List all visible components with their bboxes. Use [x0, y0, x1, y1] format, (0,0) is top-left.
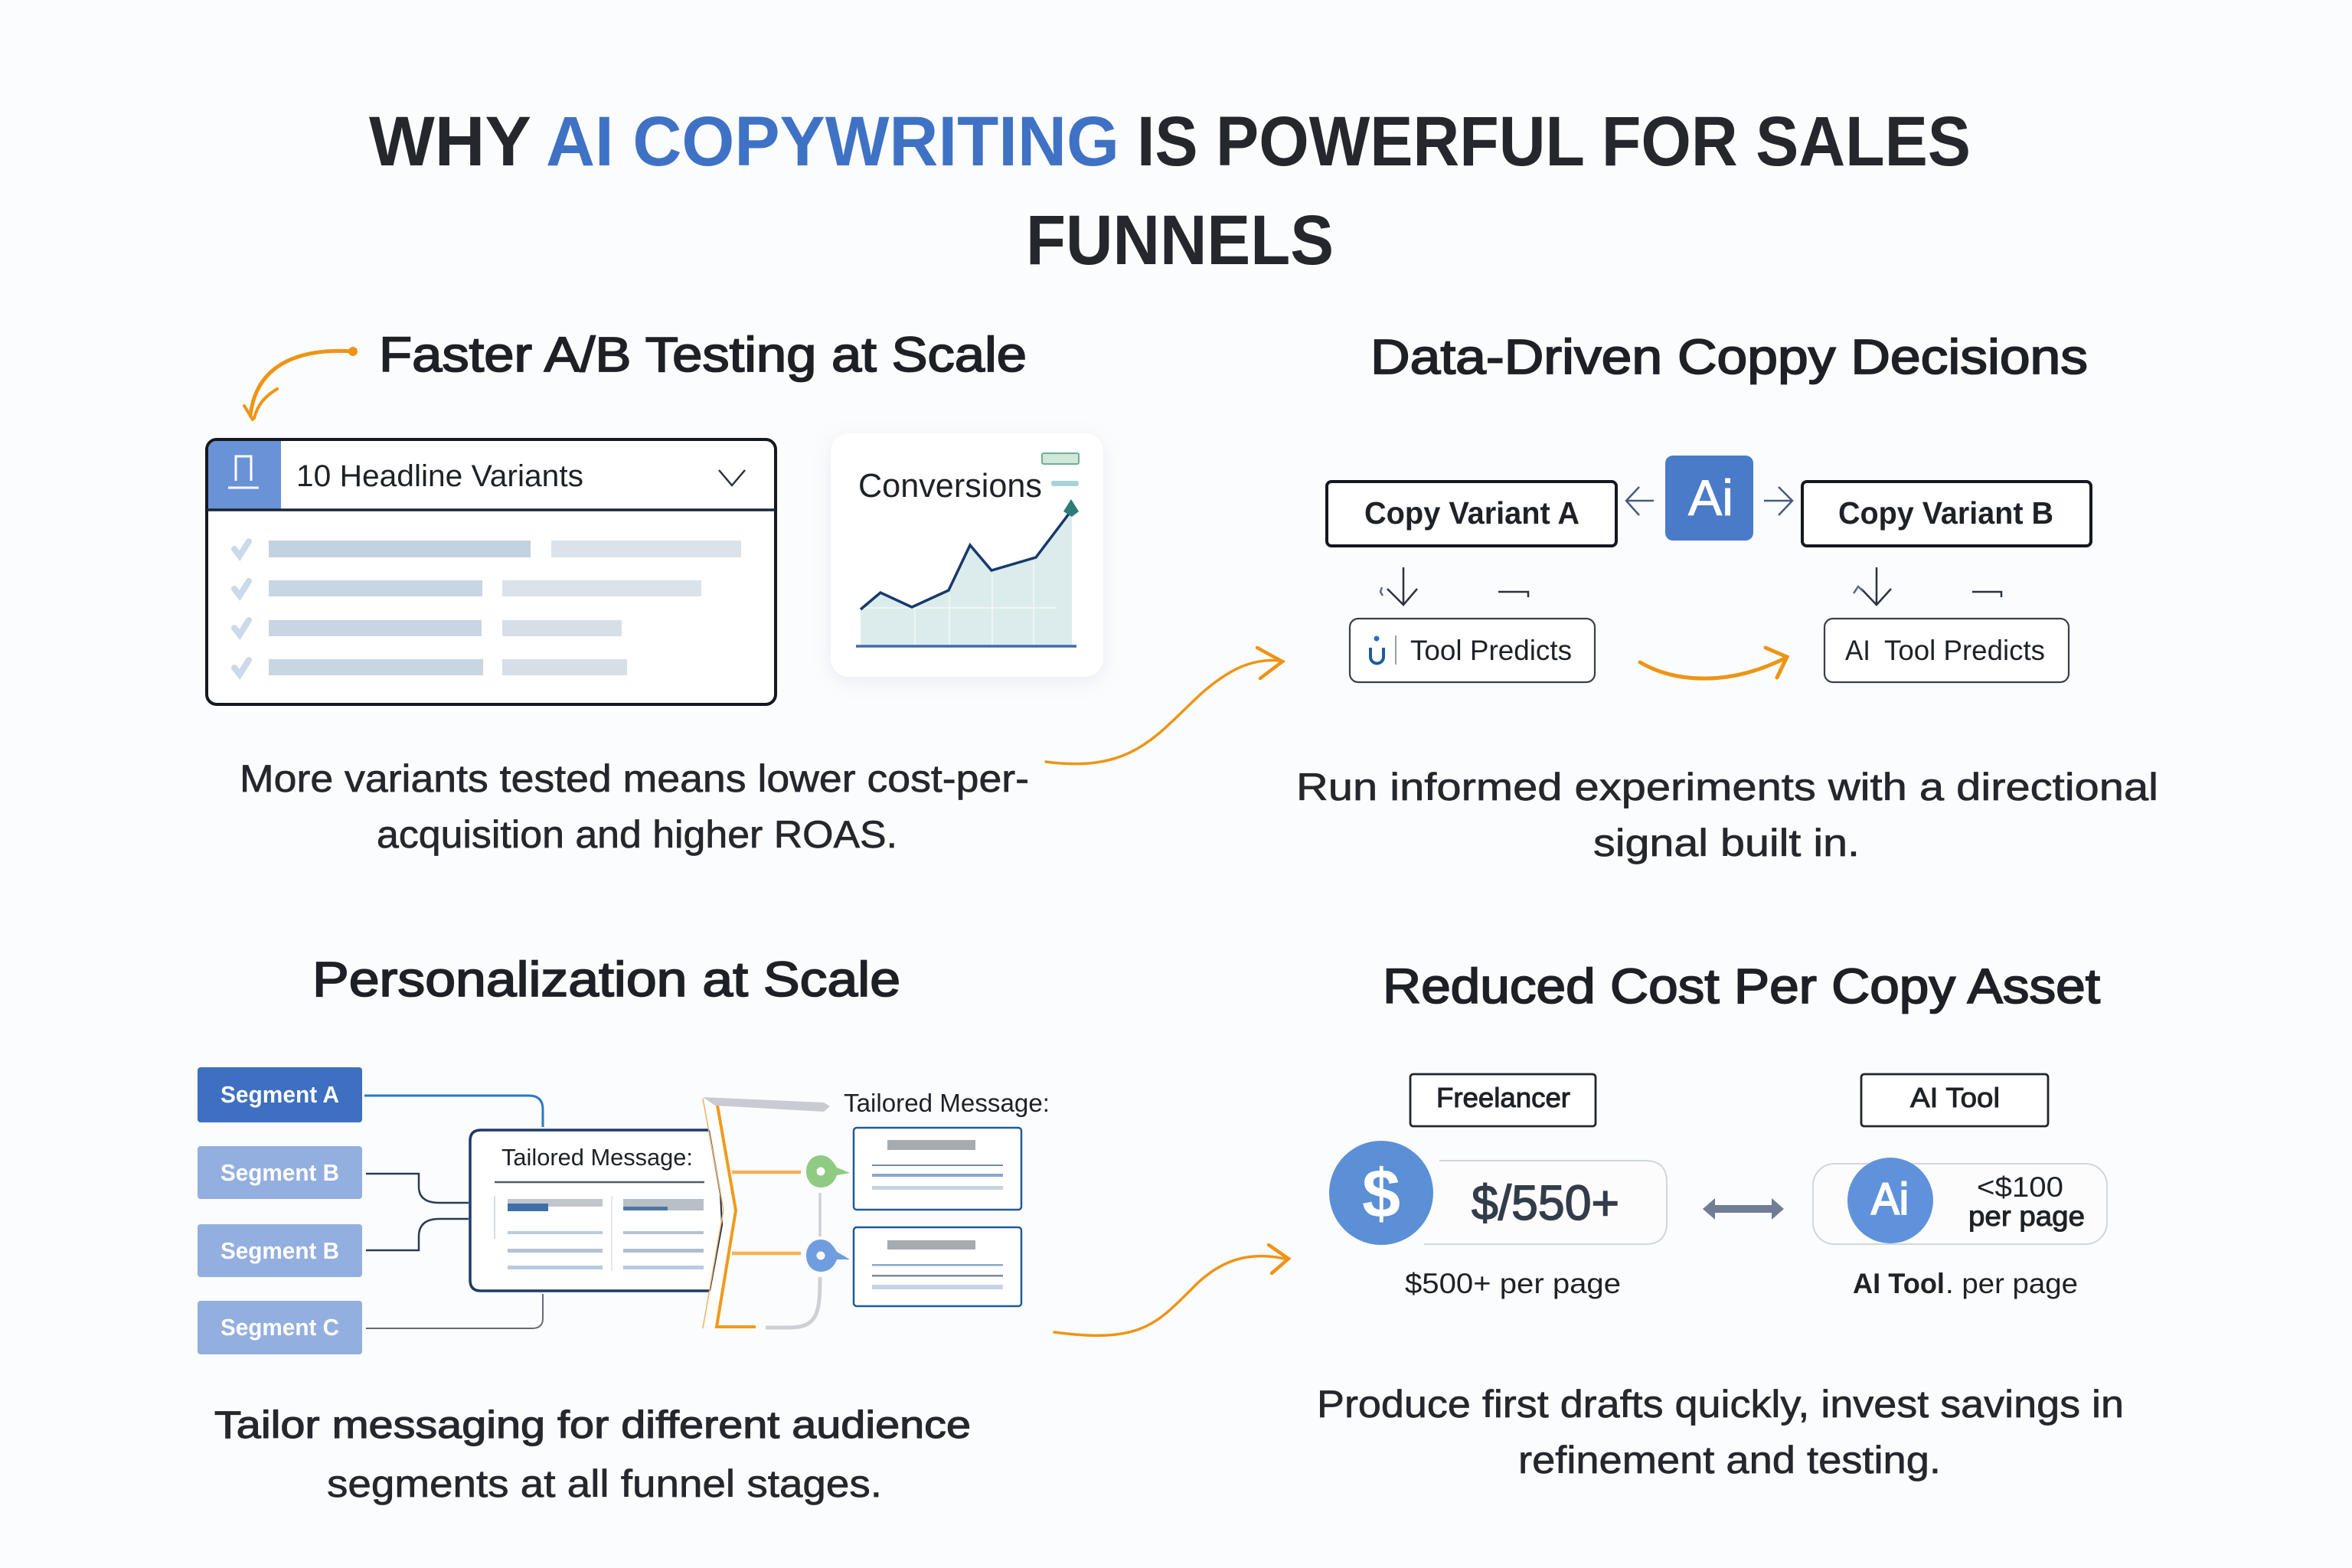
- segment A: Segment A: [220, 1081, 339, 1108]
- body text: personalization: Tailor messaging for different audience: [214, 1403, 971, 1446]
- AI tool price: <$100: [1977, 1171, 2063, 1203]
- segment C: Segment C: [220, 1314, 339, 1341]
- label: tailored message: Tailored Message:: [844, 1089, 1050, 1117]
- tool predicts box B: AI: [1845, 635, 1870, 666]
- freelancer label: Freelancer: [1436, 1082, 1570, 1113]
- message card top: [854, 1128, 1021, 1210]
- icon: j glyph: [1370, 635, 1383, 663]
- icon: dollar coin: $: [1362, 1156, 1400, 1233]
- connectors: gray vertical: [766, 1193, 820, 1328]
- tool predicts box A: [1350, 619, 1595, 682]
- central tailored message card: [470, 1130, 724, 1291]
- freelancer price pill: [1424, 1161, 1667, 1244]
- heading: faster A/B testing: Faster A/B Testing at Scale: [379, 327, 1027, 382]
- connector lines: [364, 1096, 543, 1328]
- body text: faster A/B testing: [240, 757, 1029, 856]
- headline variants list: [207, 439, 776, 704]
- panel: personalization at scale: [198, 952, 1050, 1505]
- AI tool label: [1861, 1074, 2048, 1126]
- arrows: variants to predictions: [1380, 567, 2001, 605]
- freelancer price pill: $/550+: [1472, 1175, 1619, 1230]
- icon: AI coin: [1847, 1158, 1933, 1243]
- panel: reduced cost per copy asset: [1317, 959, 2124, 1481]
- AI badge: [1665, 456, 1753, 541]
- body text: faster A/B testing: acquisition and higher ROAS.: [377, 813, 897, 856]
- arrow: orange connector to cost panel: [1054, 1245, 1289, 1335]
- body text: data-driven: signal built in.: [1593, 822, 1860, 864]
- arrow: orange between predictions: [1640, 648, 1787, 678]
- title: AI COPYWRITING: [546, 103, 1119, 181]
- tool predicts box A: Tool Predicts: [1410, 635, 1572, 666]
- heading: data-driven decisions: Data-Driven Coppy Decisions: [1370, 329, 2088, 384]
- copy variant B: Copy Variant B: [1838, 495, 2053, 531]
- body text: personalization: segments at all funnel stages.: [327, 1462, 882, 1505]
- segment B: [198, 1146, 362, 1199]
- small badge: [1042, 453, 1079, 464]
- line chart: [856, 499, 1079, 646]
- icon: chevron: [719, 470, 745, 485]
- segment A: [198, 1067, 362, 1122]
- icon: dollar coin: [1329, 1141, 1433, 1245]
- double arrow comparison: [1703, 1198, 1784, 1220]
- freelancer caption: $500+ per page: [1405, 1268, 1621, 1299]
- body text: cost: refinement and testing.: [1518, 1439, 1941, 1481]
- body text: data-driven: Run informed experiments with a directional: [1296, 766, 2158, 808]
- orange chevron: [703, 1099, 756, 1328]
- list rows: [234, 541, 741, 675]
- AI badge: Ai: [1688, 469, 1733, 526]
- panel: faster A/B testing: [207, 327, 1103, 856]
- tool predicts box B: [1824, 619, 2069, 682]
- freelancer label: [1410, 1074, 1596, 1126]
- AI tool caption: AI Tool: [1853, 1268, 1945, 1299]
- copy variant A: Copy Variant A: [1364, 495, 1579, 531]
- AI tool label: AI Tool: [1910, 1082, 2000, 1113]
- body text: personalization: [214, 1403, 971, 1505]
- icon: list header: [228, 456, 259, 488]
- arrow: orange curve to list: [244, 347, 358, 420]
- AI tool caption: . per page: [1945, 1268, 2078, 1299]
- title: IS POWERFUL FOR SALES: [1137, 103, 1971, 181]
- title: WHY: [369, 103, 531, 181]
- heading: reduced cost: Reduced Cost Per Copy Asset: [1383, 959, 2100, 1014]
- icon: green pin: [806, 1155, 850, 1187]
- copy variant B: [1802, 482, 2091, 546]
- title: FUNNELS: [1026, 201, 1334, 279]
- segment B: Segment B: [220, 1159, 339, 1186]
- AI tool caption: [1853, 1268, 2078, 1299]
- title: [369, 103, 1971, 279]
- icon: AI coin: Ai: [1871, 1174, 1909, 1224]
- copy variant A: [1327, 482, 1616, 546]
- card content lines: [495, 1196, 704, 1271]
- orange ticks: [732, 1172, 801, 1253]
- panel: data-driven copy decisions: [1296, 329, 2158, 864]
- arrows: AI to variants: [1626, 487, 1792, 515]
- body text: faster A/B testing: More variants tested means lower cost-per-: [240, 757, 1029, 800]
- card title: Tailored Message:: [501, 1144, 693, 1171]
- segment B second: [198, 1224, 362, 1277]
- body text: cost: Produce first drafts quickly, invest savings in: [1317, 1383, 2124, 1426]
- icon: blue pin: [806, 1240, 850, 1272]
- body text: cost: [1317, 1383, 2124, 1481]
- AI tool price pill: per page: [1968, 1200, 2085, 1232]
- conversions chart card: [831, 433, 1103, 677]
- arrow: orange connector to data-driven panel: [1046, 648, 1282, 764]
- segment C: [198, 1301, 362, 1354]
- list label: 10 Headline Variants: [296, 459, 583, 493]
- segment B second: Segment B: [220, 1237, 339, 1264]
- heading: personalization: Personalization at Scale: [312, 952, 900, 1007]
- chart label: Conversions: [858, 467, 1042, 505]
- AI tool price pill: [1813, 1158, 2107, 1244]
- body text: data-driven: [1296, 766, 2158, 864]
- tool predicts box B: Tool Predicts: [1884, 635, 2045, 666]
- gray arrow to label: [703, 1097, 830, 1112]
- message card bottom: [854, 1227, 1021, 1306]
